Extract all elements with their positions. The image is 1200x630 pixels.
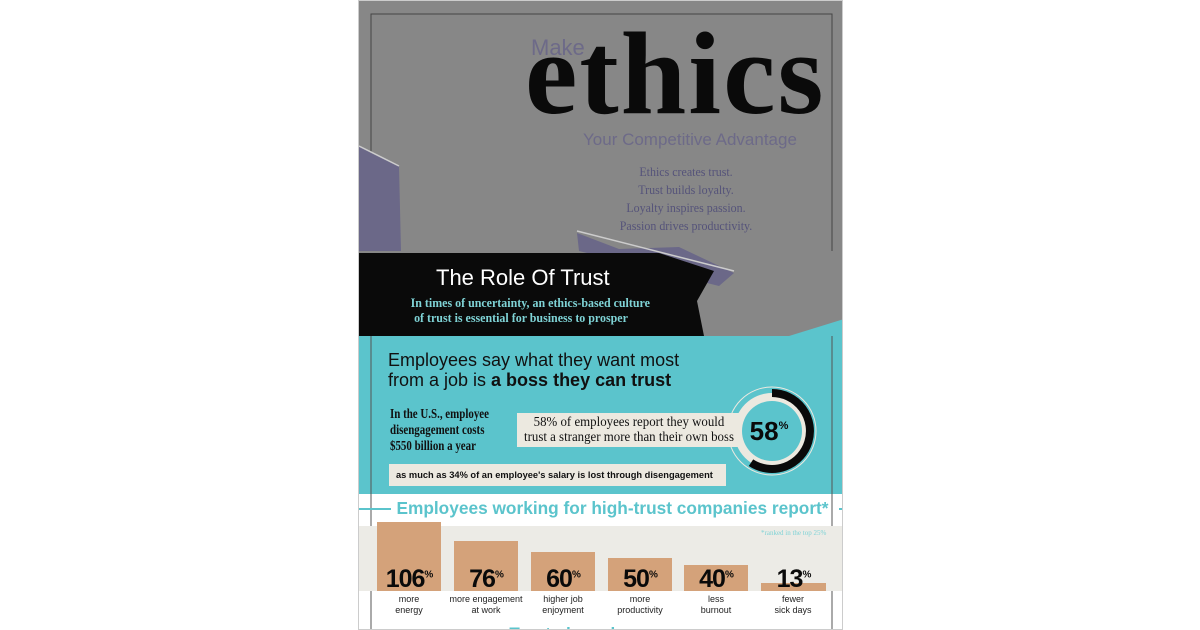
- bar: 106%: [377, 522, 441, 591]
- callout bar: as much as 34% of an employee's salary is lost through disengagement: [396, 470, 713, 480]
- subheading: [411, 295, 650, 325]
- quote text: [524, 415, 734, 445]
- values: [386, 565, 812, 593]
- bar chart: productivity: [617, 605, 663, 615]
- bar chart: at work: [471, 605, 500, 615]
- subheading: In times of uncertainty, an ethics-based culture: [411, 295, 650, 310]
- text: disengagement cost: $550 billion a year: [390, 438, 476, 453]
- donut chart 58%: 58: [750, 416, 779, 446]
- bar: 50%: [608, 558, 672, 591]
- text: disengagement cost: In the U.S., employee: [390, 406, 489, 421]
- bar: 60%: [531, 552, 595, 591]
- bar chart: more: [630, 594, 650, 604]
- background graphics: [359, 1, 842, 629]
- bar chart: more: [399, 594, 419, 604]
- quote text: 58% of employees report they would: [534, 415, 724, 430]
- intro text: Passion drives productivity.: [620, 218, 752, 233]
- donut chart 58%: %: [779, 420, 789, 432]
- intro text: Trust builds loyalty.: [638, 182, 734, 197]
- bar chart: 40%: [699, 565, 733, 593]
- bar: 13%: [761, 583, 826, 591]
- bar chart: 13%: [777, 565, 810, 593]
- bar chart: fewer: [782, 594, 804, 604]
- bar chart: sick days: [774, 605, 812, 615]
- headline: boss they can trust: Employees say what they want most: [388, 350, 679, 370]
- infographic panel: [358, 0, 843, 630]
- labels: [395, 594, 812, 615]
- subtitle: Your Competitive Advantage: [583, 130, 797, 149]
- headline: boss they can trust: [388, 350, 679, 390]
- bar chart: less: [708, 594, 724, 604]
- donut chart 58%: [728, 386, 816, 476]
- callout bar: [389, 464, 726, 486]
- bar chart: energy: [395, 605, 423, 615]
- intro text: [620, 164, 752, 233]
- bar chart: burnout: [701, 605, 731, 615]
- bar chart: enjoyment: [542, 605, 584, 615]
- bar: 76%: [454, 541, 518, 591]
- bar chart: 106%: [386, 565, 432, 593]
- heading: The Role Of Trust: The Role Of Trust: [436, 265, 610, 290]
- quote box: [517, 413, 749, 447]
- bar: 40%: [684, 565, 748, 591]
- headline: boss they can trust: from a job is a boss they can trust: [388, 370, 671, 390]
- text: disengagement cost: [390, 406, 489, 453]
- intro text: Loyalty inspires passion.: [626, 200, 746, 215]
- bar chart: more engagement: [449, 594, 523, 604]
- bar chart: 76%: [469, 565, 503, 593]
- title: ethics: ethics: [525, 8, 825, 139]
- bar chart: 50%: [623, 565, 657, 593]
- title: Make: Make: [531, 35, 585, 60]
- bar chart: higher job: [543, 594, 583, 604]
- quote text: trust a stranger more than their own boss: [524, 430, 734, 445]
- bar chart: 60%: [546, 565, 580, 593]
- text: disengagement cost: disengagement costs: [390, 422, 484, 437]
- footnote: *ranked in the top 25%: [761, 529, 826, 537]
- subheading: of trust is essential for business to prosper: [414, 310, 628, 325]
- bar chart: [377, 522, 826, 615]
- intro text: Ethics creates trust.: [639, 164, 733, 179]
- section heading: Employees working for high-trust companies report*: [396, 498, 829, 518]
